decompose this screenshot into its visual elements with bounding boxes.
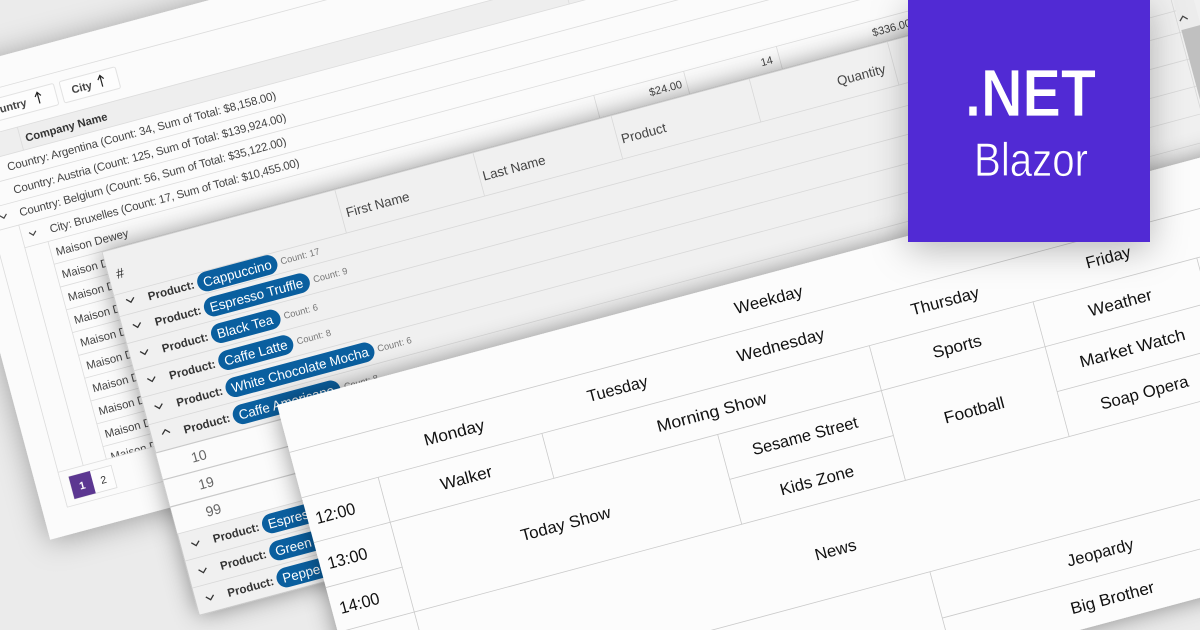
group row: Belgium: Country: Belgium (Count: 56, Sum of Total: $35,122.00) <box>18 136 288 219</box>
company name rows: Maison Dewey <box>91 364 167 395</box>
header: Tuesday: Tuesday <box>585 372 651 406</box>
cell: Walker: Walker <box>439 463 495 494</box>
pill: Espresso <box>260 488 370 535</box>
pill: Peppermint <box>274 542 386 590</box>
scrollbar <box>1165 0 1200 330</box>
quantity values: 99 <box>204 500 223 520</box>
column heading: Last Name: Last Name <box>481 152 547 184</box>
cell: Football: Football <box>942 394 1007 427</box>
count: Caffe Americano: Count: 8 <box>343 373 379 392</box>
product labels: Product: <box>153 304 203 329</box>
product labels: Product: <box>147 278 196 303</box>
cell values for row one <box>648 17 912 99</box>
pill: Peppermint: Peppermint <box>281 554 351 586</box>
pill: Espresso Truffle: Espresso Truffle <box>208 276 305 315</box>
company name rows: Maison Dewey <box>55 228 130 259</box>
header: Weekday: Weekday <box>732 282 805 318</box>
quantity values <box>189 446 223 520</box>
chip: City sort: City <box>70 79 94 97</box>
badge title: .NET: .NET <box>965 56 1096 131</box>
chip: Country sort <box>0 83 59 128</box>
cell: News: News <box>813 536 858 565</box>
product labels <box>147 278 275 600</box>
group row: Austria: Country: Austria (Count: 125, Sum of Total: $139,924.00) <box>12 112 288 197</box>
chevron: Bruxelles <box>29 231 37 236</box>
column heading: Quantity: Quantity <box>835 61 887 89</box>
pill: Green Tea: Green Tea <box>273 528 338 559</box>
cell: Morning Show: Morning Show <box>655 389 769 436</box>
company name rows: Maison Dewey <box>110 433 185 464</box>
time: 13:00: 13:00 <box>325 544 370 573</box>
header: Thursday: Thursday <box>909 284 982 319</box>
pill: Black Tea <box>209 307 283 345</box>
pill: Espresso: Espresso <box>266 503 324 532</box>
product labels: Product: <box>161 331 210 356</box>
column heading: First Name: First Name <box>344 189 411 220</box>
pill: Cappuccino <box>195 253 280 294</box>
company name rows: Maison Dewey <box>97 387 173 418</box>
column heading: Company Name: Company Name <box>24 111 109 145</box>
cell: Jeopardy: Jeopardy <box>1065 535 1136 570</box>
count: White Chocolate Mocha: Count: 6 <box>376 335 413 354</box>
product labels: Product: <box>168 358 217 383</box>
pill: Caffe Latte <box>216 333 296 372</box>
pill: Caffe Americano: Caffe Americano <box>237 383 336 423</box>
footer: pager area: 1 <box>78 479 87 493</box>
cell values for row one: 14 <box>759 55 774 69</box>
cell values for row one: $336.00 <box>871 17 912 39</box>
company name rows: Maison Dewey <box>103 410 179 441</box>
column heading: #: # <box>114 264 126 282</box>
cell: Market Watch: Market Watch <box>1078 326 1187 371</box>
company name rows: Maison Dewey <box>79 319 155 350</box>
count: Espresso Truffle: Count: 9 <box>312 266 349 285</box>
pill: Black Tea: Black Tea <box>215 312 275 341</box>
time: 12:00: 12:00 <box>313 499 358 528</box>
quantity values: 10 <box>189 446 209 466</box>
badge subtitle: Blazor: Blazor <box>974 134 1088 187</box>
panel: grouped company grid <box>0 0 989 540</box>
count: Caffe Latte: Count: 8 <box>296 328 332 346</box>
cell: Weather: Weather <box>1087 286 1155 320</box>
pill: White Chocolate Mocha: White Chocolate Mocha <box>230 344 371 396</box>
company name rows <box>55 228 185 464</box>
header: Monday: Monday <box>422 416 487 450</box>
pill: Cappuccino: Cappuccino <box>201 257 273 290</box>
header: Friday: Friday <box>1084 243 1134 272</box>
product labels: Product: <box>226 575 275 600</box>
product labels: Product: <box>175 385 224 410</box>
footer: pager area: 2 <box>99 474 108 487</box>
company name rows: Maison Dewey <box>73 296 149 327</box>
product labels: Product: <box>219 548 268 573</box>
quantity values: 19 <box>197 473 216 493</box>
cell: Soap Opera: Soap Opera <box>1098 372 1191 414</box>
company name rows: Maison Dewey <box>61 250 136 281</box>
column heading: Product: Product <box>620 120 668 146</box>
product labels: Product: <box>212 521 261 546</box>
badge: .NET Blazor <box>908 0 1150 242</box>
time: 14:00: 14:00 <box>337 589 382 618</box>
cell: Today Show: Today Show <box>519 504 613 545</box>
header: Wednesday: Wednesday <box>735 325 827 366</box>
chip: City sort <box>59 67 121 103</box>
count: Cappuccino: Count: 17 <box>279 246 321 266</box>
count: Black Tea: Count: 6 <box>282 302 319 321</box>
company name rows: Maison Dewey <box>85 342 161 373</box>
footer: pager area <box>58 228 980 507</box>
pill: Green Tea <box>267 524 345 563</box>
cell: Big Brother: Big Brother <box>1069 578 1157 618</box>
cell: Sports: Sports <box>931 332 984 362</box>
group row: Argentina: Country: Argentina (Count: 34, Sum of Total: $8,158.00) <box>6 90 278 174</box>
chevrons <box>126 297 215 601</box>
cell values for row one: $24.00 <box>648 79 684 99</box>
company name rows: Maison Dewey <box>67 273 142 304</box>
panel: weekly schedule table <box>277 69 1200 630</box>
product labels: Product: <box>182 412 232 437</box>
pill: Caffe Latte: Caffe Latte <box>223 337 289 368</box>
chevron: Belgium <box>0 214 7 219</box>
group row: Bruxelles: City: Bruxelles (Count: 17, Sum of Total: $10,455.00) <box>49 157 301 236</box>
cell: Kids Zone: Kids Zone <box>778 462 856 499</box>
cell: Sesame Street: Sesame Street <box>750 414 860 459</box>
